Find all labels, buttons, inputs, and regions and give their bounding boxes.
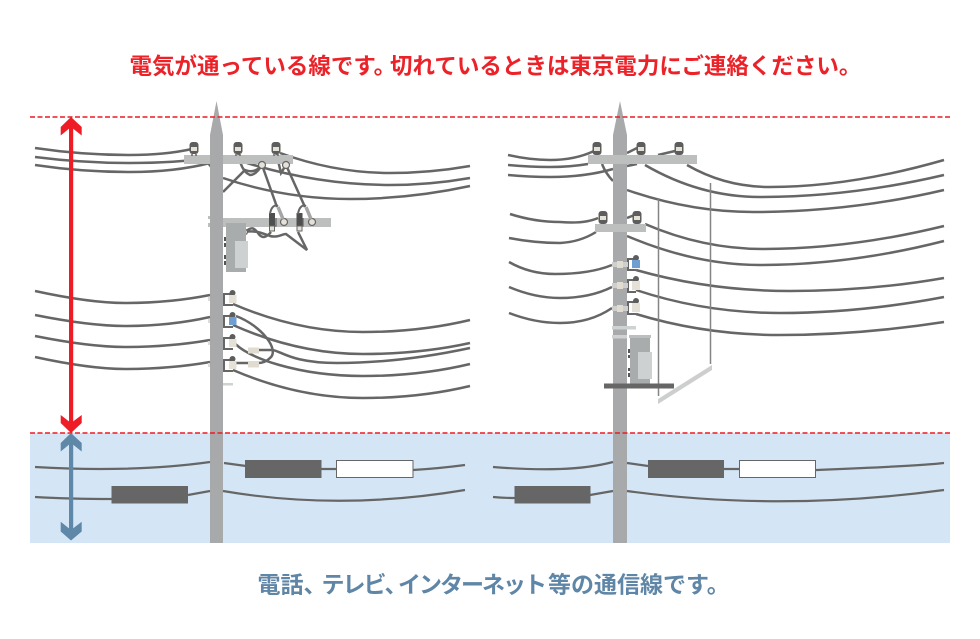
right upper crossarm bbox=[588, 155, 697, 164]
right platform bbox=[604, 384, 674, 388]
left pole assembly bbox=[35, 101, 470, 543]
right power wires bbox=[508, 148, 944, 335]
right pole bbox=[613, 101, 627, 543]
left telecom wires and boxes bbox=[35, 460, 465, 504]
right brace bbox=[658, 365, 712, 404]
caption: telecom lines: 等の通信線です。 bbox=[548, 572, 730, 598]
left cutout switches bbox=[269, 205, 311, 231]
title: power lines caption: 切れているときは東京電力にご連絡ください。 bbox=[390, 53, 861, 79]
arrow: telecom height bbox=[61, 433, 82, 540]
right insulators bbox=[592, 142, 684, 224]
right stay wires bbox=[658, 183, 710, 396]
left pole bbox=[210, 101, 223, 543]
right lower crossarm bbox=[595, 224, 646, 232]
left transformer bbox=[224, 223, 248, 272]
power zone boundary dashed lines bbox=[30, 117, 950, 433]
left lower insulators bbox=[208, 290, 259, 386]
caption: telecom lines: 電話、 bbox=[258, 572, 326, 598]
arrow: power height bbox=[61, 117, 82, 433]
right transformer bbox=[628, 335, 652, 384]
panel: telecom band background bbox=[30, 433, 950, 543]
left wire clamps bbox=[242, 162, 316, 234]
right mid insulators bbox=[612, 255, 640, 338]
right pole assembly bbox=[493, 101, 944, 543]
left upper crossarm bbox=[184, 155, 293, 164]
left upper insulators bbox=[190, 142, 280, 156]
left upper power wires bbox=[35, 148, 470, 250]
left transformer crossarm bbox=[208, 216, 331, 227]
right telecom wires and boxes bbox=[493, 460, 944, 504]
caption: telecom lines: テレビ、 bbox=[322, 572, 406, 598]
caption: telecom lines: インターネット bbox=[398, 572, 545, 598]
title: power lines caption: 電気が通っている線です。 bbox=[130, 53, 396, 79]
left lower power wires bbox=[35, 291, 470, 398]
